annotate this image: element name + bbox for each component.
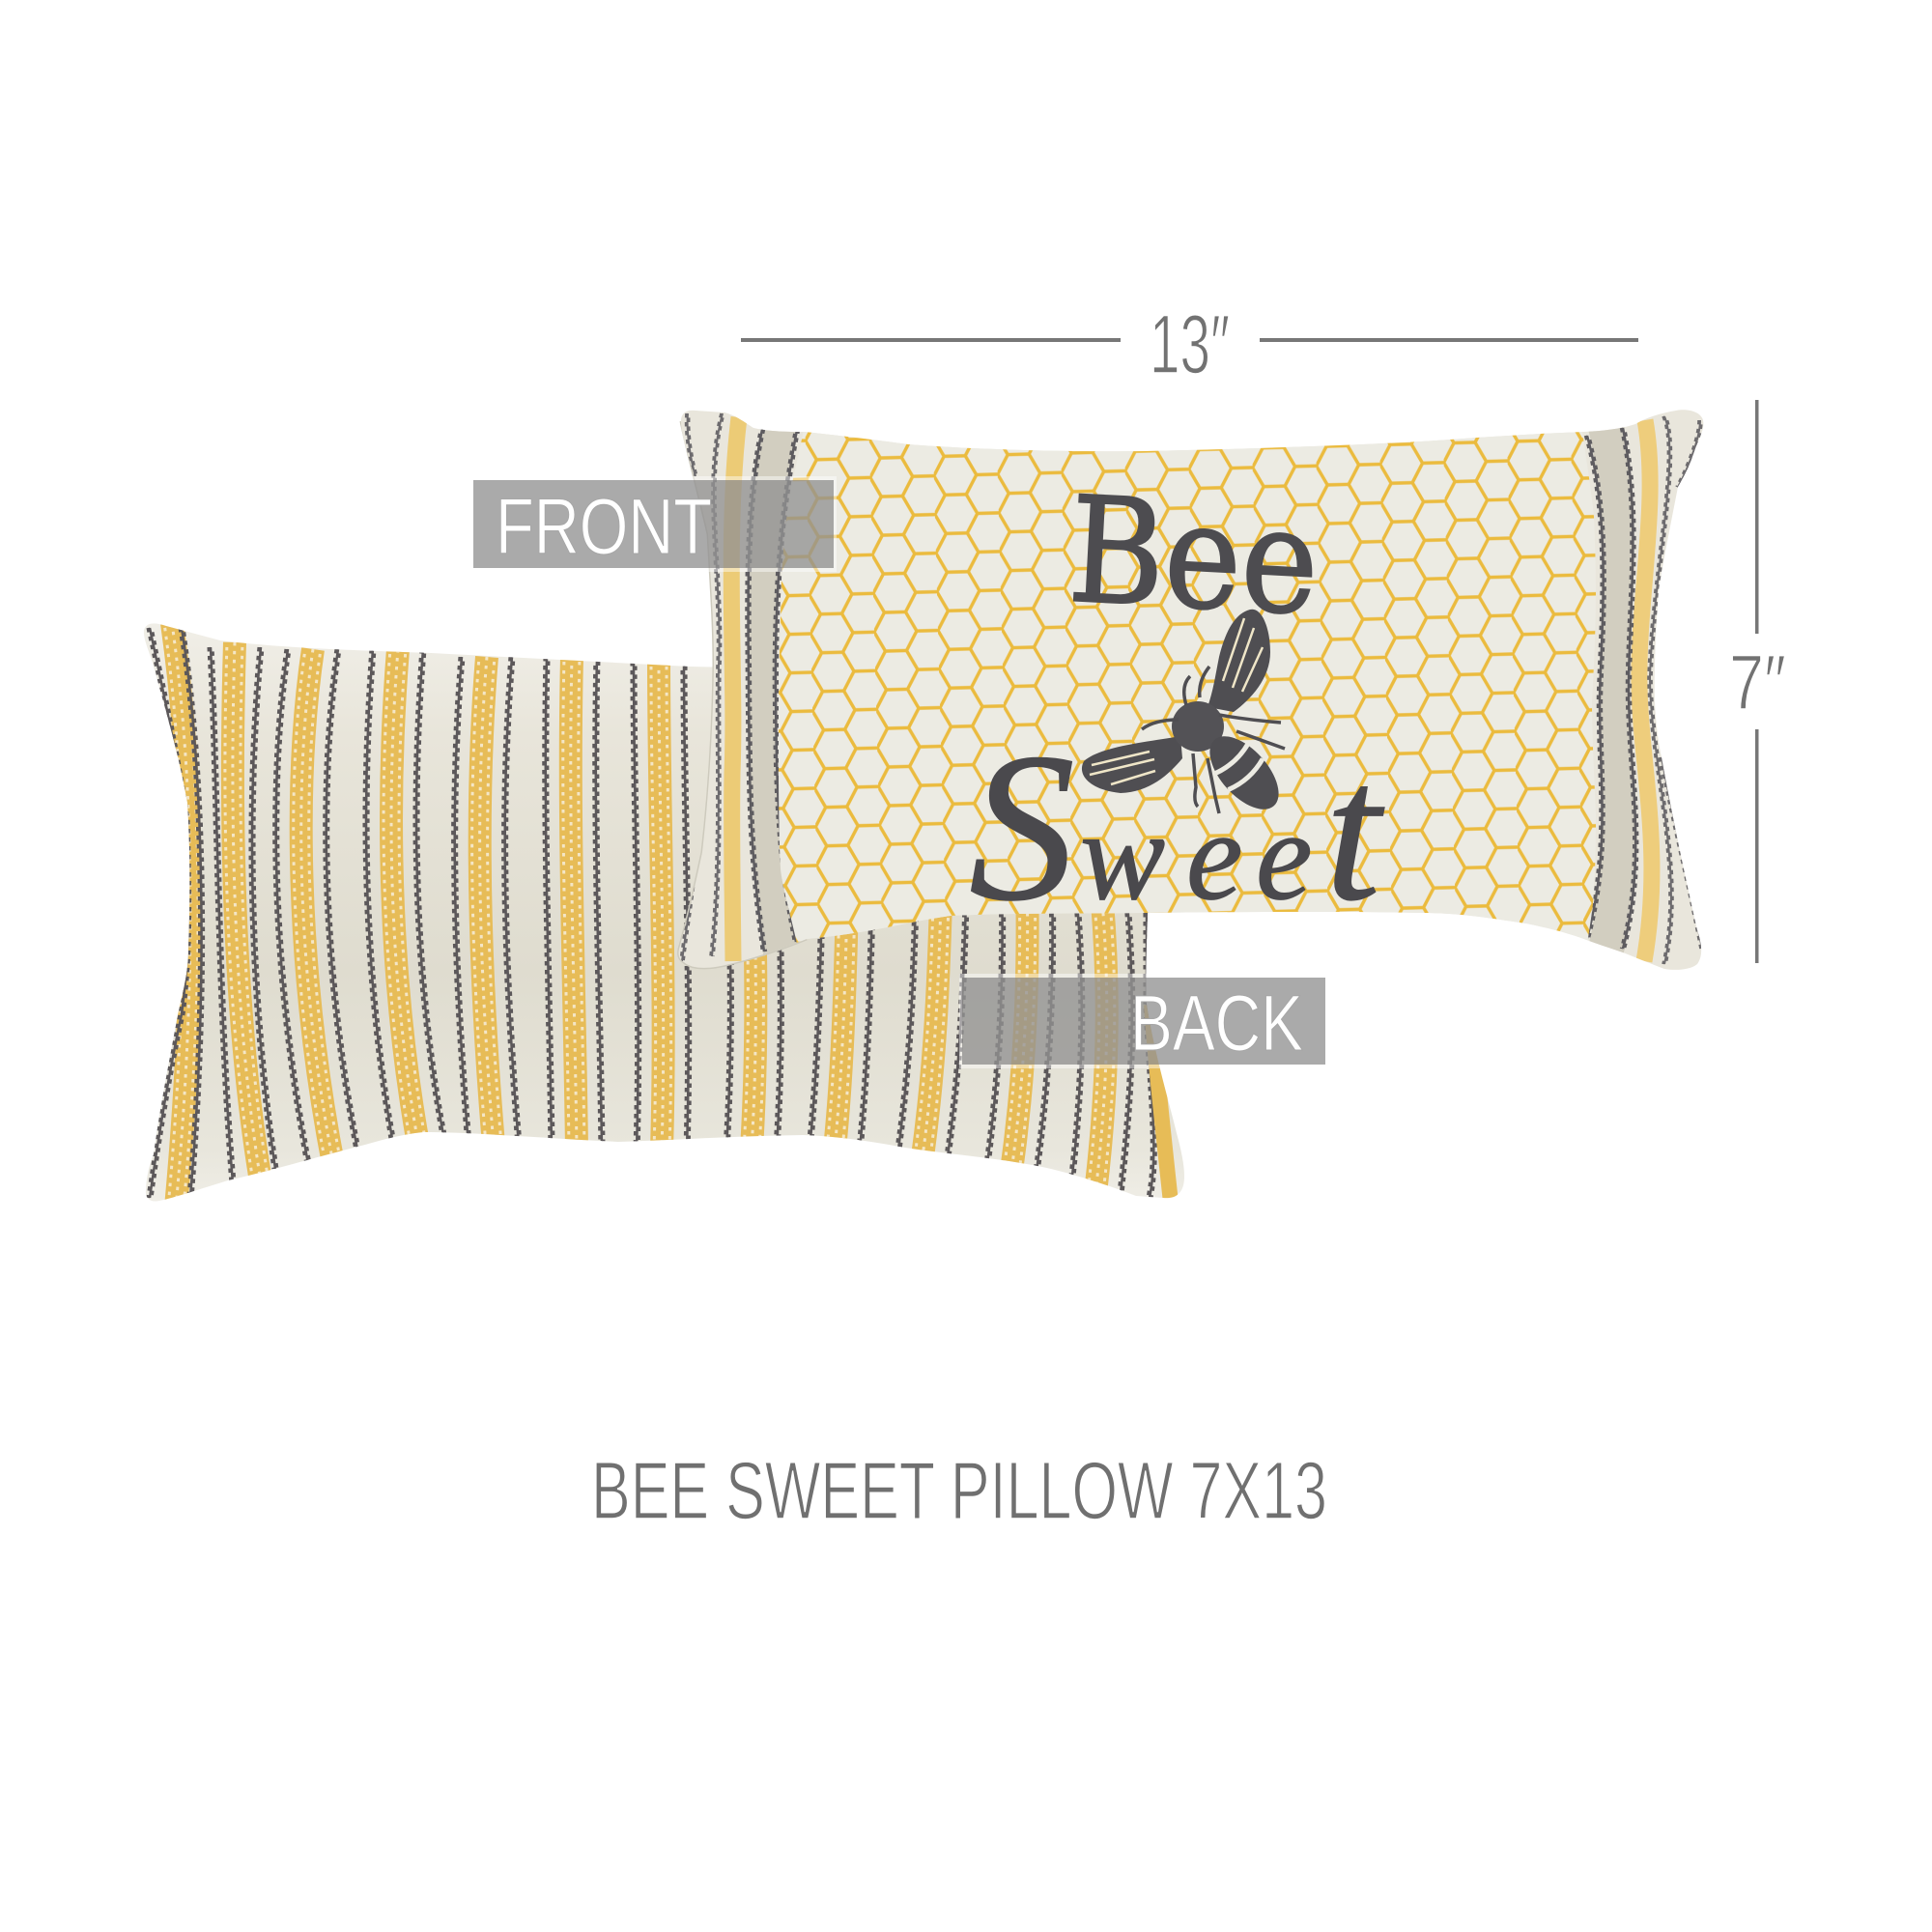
heading on pillow: Sweet: e [1186,784,1243,926]
label: front [470,476,837,572]
width value: 13″ [1150,298,1230,391]
heading on pillow: Bee: Bee [1065,465,1322,648]
label text: BACK [1130,980,1303,1067]
label text: FRONT [496,483,712,571]
dimension: height 7 inches [1729,400,1786,963]
dimension: width 13 inches [741,298,1638,391]
abdomen [1197,724,1292,821]
front pillow [671,401,1715,980]
legs and antennae [1142,667,1285,813]
icon: bee [1082,610,1292,821]
heading on pillow: Sweet: t [1325,723,1385,942]
label box [470,476,837,572]
back pillow stripes [148,623,1171,1208]
honeycomb panel [779,425,1596,966]
back pillow fabric [135,618,1198,1208]
left yellow band [731,417,739,961]
front pillow fabric and side bands [671,401,1715,980]
thorax [1172,701,1224,752]
left taupe band [750,430,797,954]
lower wing [1082,736,1182,793]
right yellow band [1639,420,1652,961]
heading on pillow: Sweet: w [1080,784,1165,926]
band zigzag stripes [681,413,1703,964]
label: back [959,974,1327,1068]
label box [959,974,1327,1068]
height value: 7″ [1729,639,1786,726]
upper wing [1208,610,1270,712]
heading on pillow: Sweet: e [1256,784,1313,926]
title: BEE SWEET PILLOW 7X13 [591,1445,1327,1536]
heading on pillow: Sweet: S [969,709,1075,945]
infographic canvas [144,315,1784,1519]
front pillow outline edge [679,421,807,968]
back pillow [135,618,1198,1208]
right taupe band [1587,420,1635,956]
